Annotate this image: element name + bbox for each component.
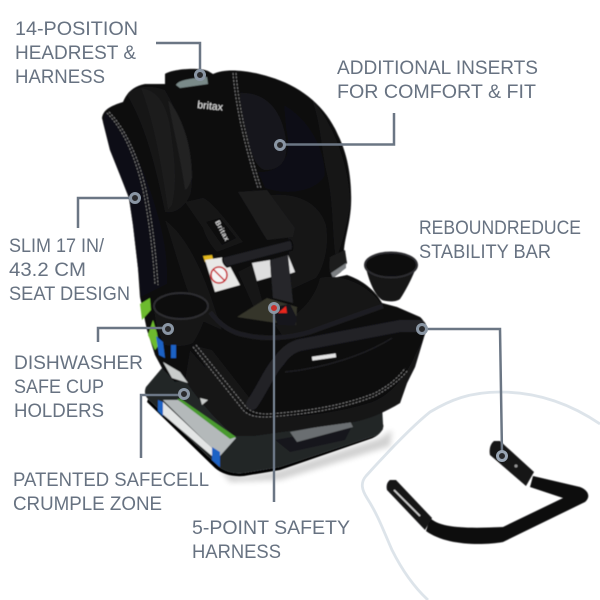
connector [425, 329, 502, 453]
callout: cup holders: HOLDERS [14, 400, 104, 422]
seat front lip [210, 306, 383, 338]
label: ADDITIONAL INSERTS [337, 57, 538, 79]
illustration: car seat [102, 69, 426, 482]
callout: safecell: CRUMPLE ZONE [13, 493, 162, 515]
callout: harness: HARNESS [192, 541, 281, 563]
label: REBOUNDREDUCE [419, 217, 581, 239]
side grey tip [329, 250, 347, 278]
base label strip [158, 399, 236, 467]
seat main shell [102, 69, 426, 436]
left bracket [387, 480, 432, 530]
callout: headrest: HEADREST & [15, 42, 136, 64]
connector [285, 113, 394, 144]
foam bar [426, 476, 588, 544]
seat base [145, 368, 383, 473]
label: SLIM 17 IN/ [9, 235, 105, 257]
callout: rebound bar: STABILITY BAR [419, 241, 551, 263]
side labels [140, 298, 208, 405]
callout: slim seat: SEAT DESIGN [9, 283, 130, 305]
right cup holder [365, 252, 417, 301]
connector [156, 43, 200, 75]
callout: cup holders: SAFE CUP [14, 376, 104, 398]
headrest handle [176, 77, 208, 88]
wing cushions [127, 87, 193, 213]
callout: headrest: HARNESS [15, 66, 105, 88]
warning labels [203, 255, 295, 292]
stitching [107, 73, 408, 417]
label: DISHWASHER [14, 352, 143, 374]
label: PATENTED SAFECELL [13, 469, 209, 491]
left cup holder [154, 293, 208, 346]
harness shoulder pads [185, 190, 295, 252]
right bracket [490, 441, 534, 486]
harness straps [238, 265, 262, 310]
callout: cup holders [14, 324, 172, 422]
callout: safecell [13, 390, 209, 515]
callout: rebound bar [418, 217, 581, 460]
chest clip [223, 240, 293, 267]
britax harness tag: Britax [213, 220, 230, 242]
seat shadow [220, 430, 392, 482]
label: 5-POINT SAFETY [192, 517, 350, 539]
callout: slim seat: 43.2 CM [9, 259, 86, 281]
panel: rebound bar inset outline [362, 392, 600, 600]
rebound bar image [387, 441, 588, 544]
label: 14-POSITION [15, 18, 138, 40]
buckle [237, 298, 297, 326]
seat foot handle [275, 426, 352, 452]
lower seat area [232, 325, 399, 393]
callout: slim seat [9, 194, 140, 305]
connector [141, 395, 181, 458]
connector [98, 328, 165, 342]
connector [78, 198, 132, 228]
callout: headrest [15, 18, 204, 88]
armrest bar [252, 326, 420, 404]
back rest padding [165, 74, 262, 200]
callout: inserts: FOR COMFORT & FIT [337, 81, 536, 103]
brand logo: britax [197, 99, 224, 114]
armrest tag [312, 353, 336, 361]
callout: harness [192, 304, 350, 563]
callout: inserts [276, 57, 538, 150]
seat cushion [275, 277, 383, 335]
connector [273, 311, 275, 502]
side shell band [103, 112, 167, 297]
